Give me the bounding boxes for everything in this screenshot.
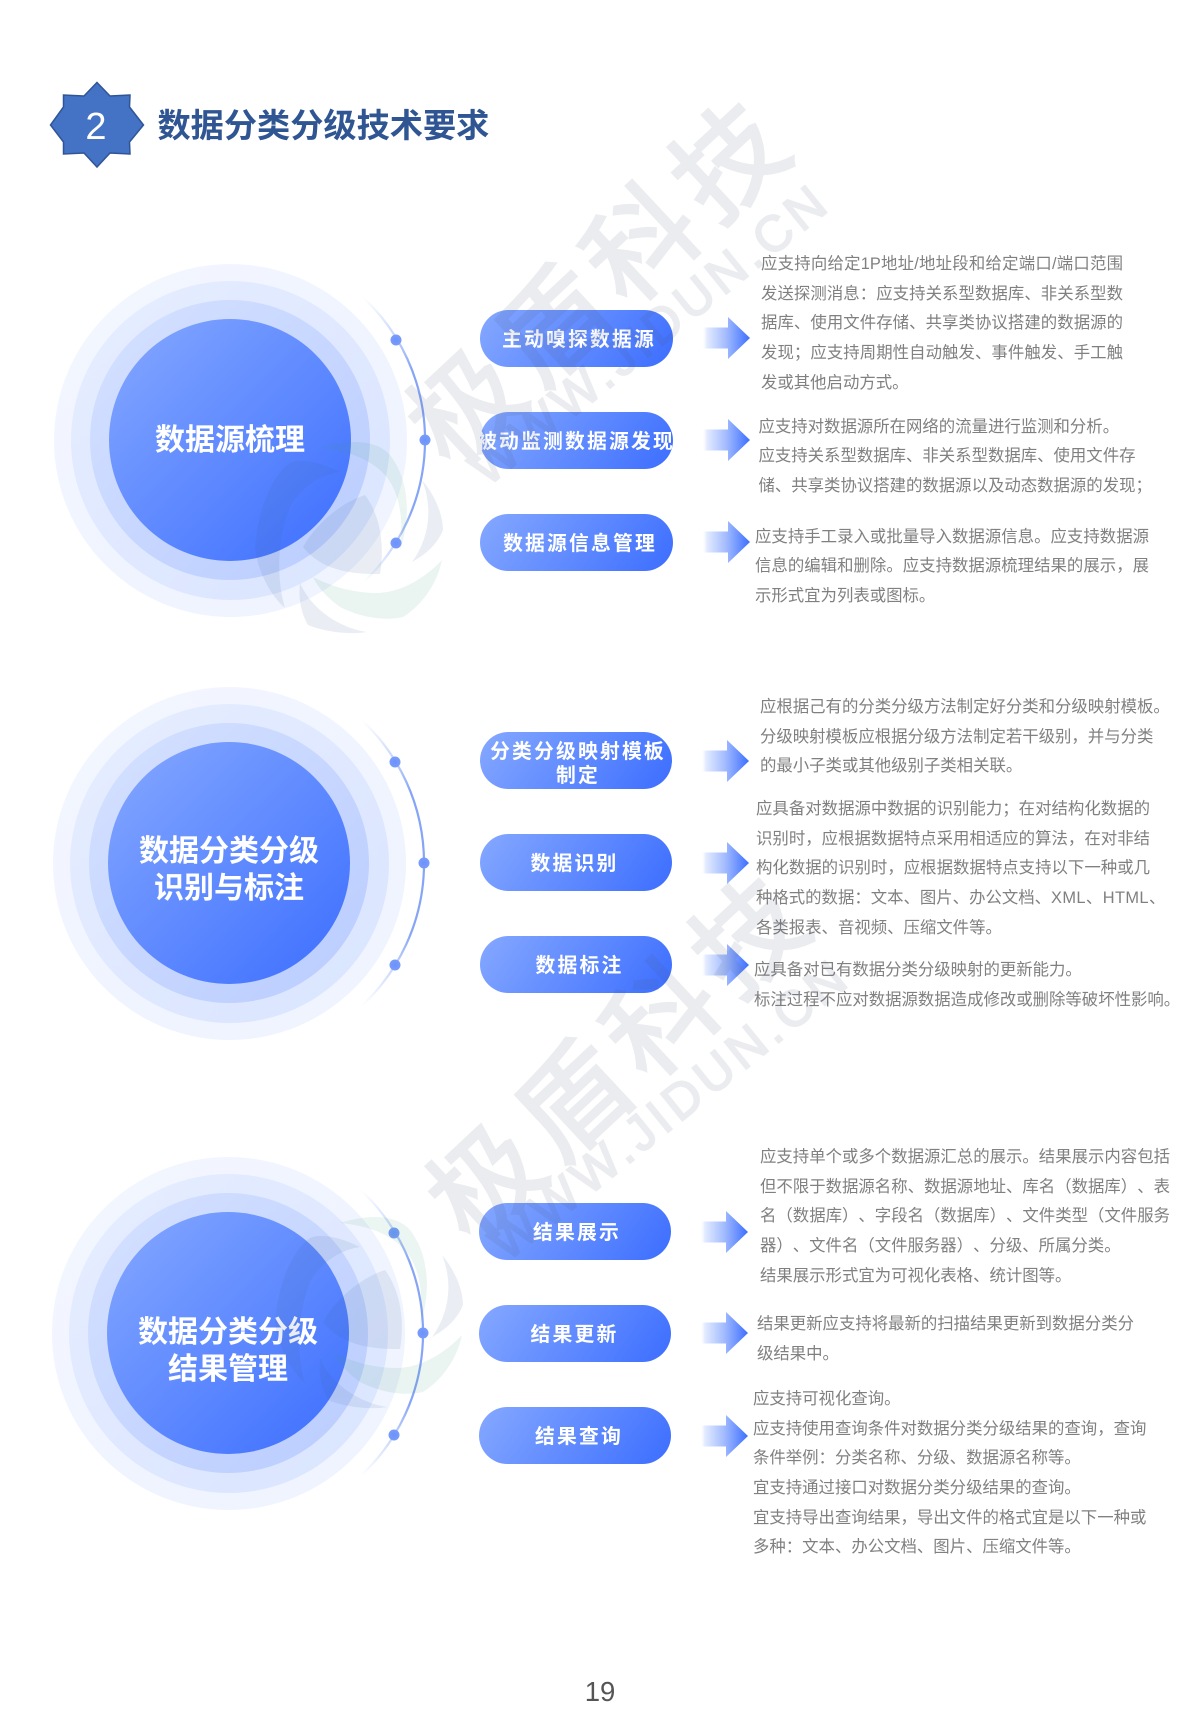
- text: 结果查询: 多种：文本、办公文档、图片、压缩文件等。: [753, 1538, 1081, 1556]
- concentric circle: 数据分类分级识别与标注: [53, 687, 406, 1040]
- text: 被动监测数据源发现: 储、共享类协议搭建的数据源以及动态数据源的发现；: [758, 477, 1152, 495]
- arrow: [704, 419, 750, 461]
- watermark text top: WWW.JIDUN.CN: [459, 172, 841, 496]
- watermark text bottom: WWW.JIDUN.CN: [479, 947, 861, 1271]
- pill: 数据源信息管理: 数据源信息管理: [503, 533, 657, 555]
- text: 分类分级映射模板制定: 应根据己有的分类分级方法制定好分类和分级映射模板。: [760, 698, 1170, 716]
- text: 数据识别: 构化数据的识别时，应根据数据特点支持以下一种或几: [756, 859, 1150, 877]
- panel: 数据源梳理: [54, 254, 1152, 617]
- text: 主动嗅探数据源: [761, 254, 1123, 392]
- text: 数据标注: 标注过程不应对数据源数据造成修改或删除等破坏性影响。: [754, 991, 1180, 1009]
- arrow: [704, 944, 749, 986]
- text: 结果查询: 条件举例：分类名称、分级、数据源名称等。: [753, 1449, 1081, 1467]
- pill: 分类分级映射模板制定: 制定: [556, 765, 600, 787]
- text: 结果查询: 宜支持导出查询结果，导出文件的格式宜是以下一种或: [753, 1509, 1146, 1527]
- text: 被动监测数据源发现: [758, 418, 1152, 495]
- pill: 被动监测数据源发现: [480, 412, 673, 469]
- arrow: [704, 317, 750, 359]
- text: 数据源信息管理: 应支持手工录入或批量导入数据源信息。应支持数据源: [755, 528, 1149, 546]
- text: 结果展示: [760, 1148, 1170, 1285]
- pill: 数据源信息管理: [480, 514, 673, 571]
- title: 数据分类分级技术要求: [158, 108, 489, 145]
- pill: 数据识别: 数据识别: [531, 853, 618, 875]
- text: 数据标注: 应具备对已有数据分类分级映射的更新能力。: [754, 961, 1082, 979]
- text: 数据识别: 各类报表、音视频、压缩文件等。: [756, 919, 1002, 937]
- arc with dots: [366, 1196, 428, 1470]
- text: 结果查询: 应支持使用查询条件对数据分类分级结果的查询，查询: [753, 1420, 1146, 1438]
- pill: 分类分级映射模板制定: [480, 732, 672, 789]
- arrow: [704, 521, 750, 563]
- icon: numbered star badge: [50, 82, 144, 168]
- text: 结果查询: 应支持可视化查询。: [753, 1390, 901, 1408]
- text: 主动嗅探数据源: 发或其他启动方式。: [761, 374, 909, 392]
- text: 被动监测数据源发现: 应支持关系型数据库、非关系型数据库、使用文件存: [758, 447, 1135, 465]
- concentric circle: 数据分类分级结果管理: [52, 1157, 405, 1510]
- pill: 结果更新: 结果更新: [531, 1324, 618, 1346]
- concentric circle: 数据源梳理: [54, 264, 407, 617]
- text: 结果展示: 应支持单个或多个数据源汇总的展示。结果展示内容包括: [760, 1148, 1170, 1166]
- arrow: [702, 1312, 748, 1354]
- arrow: [704, 842, 749, 884]
- pill: 主动嗅探数据源: [480, 310, 673, 367]
- page number: 19: [585, 1676, 615, 1707]
- panel: 数据分类分级识别与标注: [53, 687, 1180, 1040]
- concentric circle: 数据分类分级识别与标注: 识别与标注: [154, 872, 304, 905]
- watermark logo bottom: [275, 1217, 463, 1408]
- arrow: [702, 1211, 748, 1253]
- arc with dots: [367, 726, 430, 1000]
- concentric circle: 数据源梳理: 数据源梳理: [155, 424, 305, 457]
- text: 数据源信息管理: 信息的编辑和删除。应支持数据源梳理结果的展示，展: [755, 557, 1149, 575]
- concentric circle: 数据分类分级识别与标注: 数据分类分级: [139, 835, 319, 868]
- watermark text top: 极盾科技: [368, 54, 825, 496]
- pill: 结果查询: 结果查询: [535, 1426, 623, 1448]
- text: 主动嗅探数据源: 据库、使用文件存储、共享类协议搭建的数据源的: [761, 314, 1123, 332]
- text: 数据识别: 种格式的数据：文本、图片、办公文档、XML、HTML、: [756, 889, 1166, 907]
- text: 结果展示: 器）、文件名（文件服务器）、分级、所属分类。: [760, 1237, 1121, 1255]
- pill: 被动监测数据源发现: 被动监测数据源发现: [477, 431, 675, 453]
- watermark text bottom: 极盾科技: [388, 829, 845, 1271]
- text: 数据源信息管理: [755, 528, 1149, 605]
- text: 主动嗅探数据源: 应支持向给定1P地址/地址段和给定端口/端口范围: [761, 255, 1123, 273]
- text: 主动嗅探数据源: 发送探测消息：应支持关系型数据库、非关系型数: [761, 285, 1123, 303]
- text: 结果更新: 结果更新应支持将最新的扫描结果更新到数据分类分: [757, 1315, 1134, 1333]
- pill: 数据识别: [480, 834, 672, 891]
- text: 分类分级映射模板制定: 的最小子类或其他级别子类相关联。: [760, 757, 1022, 775]
- pill: 结果展示: [479, 1203, 671, 1260]
- pill: 数据标注: [480, 936, 672, 993]
- arrow: [702, 1415, 748, 1457]
- pill: 结果查询: [479, 1407, 671, 1464]
- pill: 分类分级映射模板制定: 分类分级映射模板: [490, 741, 666, 763]
- text: 结果查询: 宜支持通过接口对数据分类分级结果的查询。: [753, 1479, 1081, 1497]
- pill: 结果更新: [479, 1305, 671, 1362]
- concentric circle: 数据分类分级结果管理: 数据分类分级: [138, 1316, 318, 1349]
- text: 数据识别: 应具备对数据源中数据的识别能力；在对结构化数据的: [756, 800, 1150, 818]
- icon: numbered star badge: 2: [85, 106, 107, 148]
- pill: 主动嗅探数据源: 主动嗅探数据源: [502, 329, 656, 351]
- panel: 数据分类分级结果管理: [52, 1148, 1170, 1556]
- text: 数据源信息管理: 示形式宜为列表或图标。: [755, 587, 935, 605]
- text: 主动嗅探数据源: 发现；应支持周期性自动触发、事件触发、手工触: [761, 344, 1123, 362]
- text: 数据标注: [754, 960, 1180, 1009]
- text: 结果更新: [757, 1314, 1134, 1363]
- watermark logo top: [255, 442, 443, 633]
- text: 结果展示: 名（数据库）、字段名（数据库）、文件类型（文件服务: [760, 1207, 1170, 1225]
- text: 结果展示: 但不限于数据源名称、数据源地址、库名（数据库）、表: [760, 1178, 1170, 1196]
- text: 结果展示: 结果展示形式宜为可视化表格、统计图等。: [760, 1267, 1071, 1285]
- text: 分类分级映射模板制定: [760, 698, 1170, 775]
- text: 结果查询: [753, 1390, 1146, 1556]
- pill: 数据标注: 数据标注: [536, 955, 623, 977]
- text: 数据识别: 识别时，应根据数据特点采用相适应的算法，在对非结: [756, 830, 1150, 848]
- arc with dots: [368, 304, 430, 576]
- concentric circle: 数据分类分级结果管理: 结果管理: [168, 1353, 288, 1386]
- text: 结果更新: 级结果中。: [757, 1345, 839, 1363]
- arrow: [704, 740, 749, 782]
- text: 分类分级映射模板制定: 分级映射模板应根据分级方法制定若干级别，并与分类: [760, 728, 1153, 746]
- pill: 结果展示: 结果展示: [533, 1222, 621, 1244]
- text: 被动监测数据源发现: 应支持对数据源所在网络的流量进行监测和分析。: [758, 418, 1119, 436]
- text: 数据识别: [756, 800, 1166, 937]
